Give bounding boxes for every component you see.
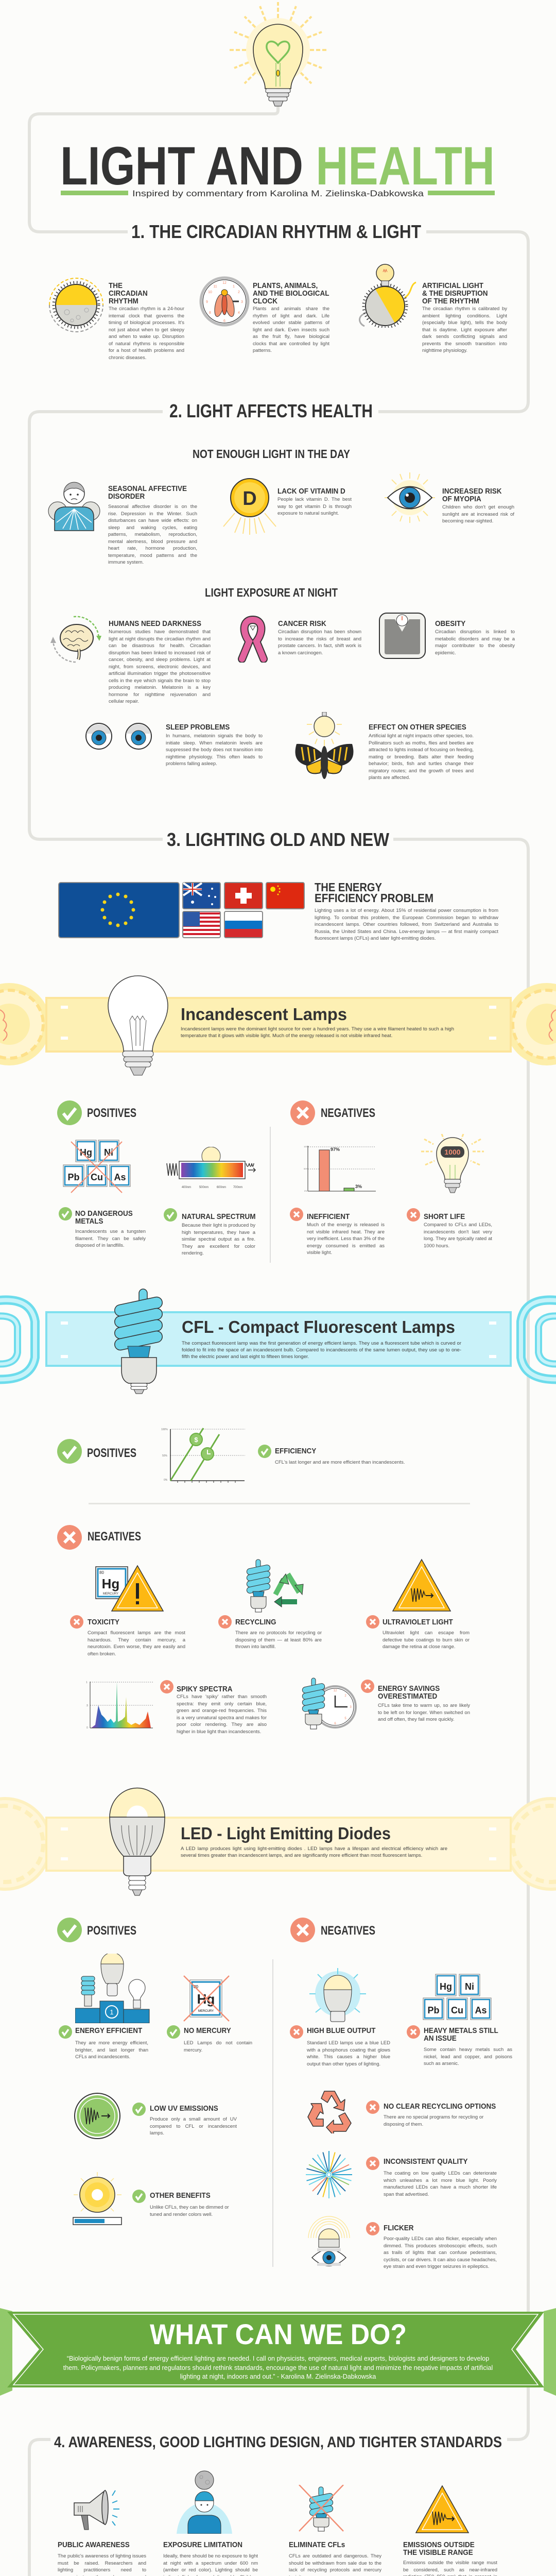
- icon: CFL with clock: 12: [334, 1689, 337, 1692]
- icon: crossed mercury: Hg: [197, 1991, 215, 2007]
- icon: heavy metals tiles: Ni: [465, 1981, 474, 1992]
- item: obesity: [379, 613, 515, 659]
- item: no mercury: [167, 2025, 254, 2056]
- icon: clock with fly: 1: [233, 285, 235, 289]
- item: circadian rhythm: [49, 278, 184, 361]
- icon: moth under bulb: [296, 712, 353, 779]
- item: exposure limitation: [163, 2541, 259, 2576]
- icon: CFL with clock: 6: [334, 1722, 336, 1725]
- item: circadian rhythm: RHYTHM: [109, 297, 138, 306]
- item: public awareness: [58, 2541, 147, 2576]
- banner: incandescent lamps: [0, 975, 556, 1076]
- item: spiky spectra: CFLs have 'spiky' rather than smooth spectra: they emit only certain blue, green and orange-red frequencies. This is a very unnatural spectra and makes for poor color rendering. They are also higher in blue light than incandescents.: [177, 1694, 267, 1734]
- item: flicker: [305, 2215, 498, 2279]
- item: heavy metals still an issue: AN ISSUE: [424, 2034, 457, 2043]
- item: high blue output: Standard LED lamps use a blue LED with a phosphorus coating that glows white. This causes a higher blue output than other types of lighting.: [307, 2040, 390, 2067]
- icon: natural spectrum bulb: 500nm: [199, 1186, 208, 1189]
- item: plants animals clock: [200, 276, 329, 353]
- banner: CFL: CFL - Compact Fluorescent Lamps: [182, 1317, 455, 1336]
- item: plants animals clock: AND THE BIOLOGICAL: [253, 289, 329, 298]
- item: spiky spectra: SPIKY SPECTRA: [177, 1685, 233, 1693]
- item: other benefits: OTHER BENEFITS: [150, 2191, 211, 2200]
- icon: ultraviolet warning: [392, 1558, 451, 1612]
- icon: heavy metals tiles: [423, 1974, 493, 2021]
- item: heavy metals still an issue: Some contain heavy metals such as nickel, lead and copper, and poisons such as arsenic.: [424, 2047, 512, 2066]
- item: no dangerous metals: [59, 1207, 147, 1250]
- text block: energy efficiency problem: [315, 880, 498, 941]
- chart: spiky spectra: 0: [86, 1726, 88, 1730]
- icon: crossed CFL: [298, 2485, 344, 2532]
- icon: clock with fly: 10: [208, 291, 212, 294]
- item: toxicity: TOXICITY: [88, 1618, 119, 1626]
- item: inefficient: INEFFICIENT: [307, 1212, 350, 1221]
- item: humans need darkness: [50, 616, 211, 704]
- icon: 1000 hours bulb: [421, 1134, 484, 1197]
- icon: sun/moon circle: [49, 278, 103, 332]
- item: obesity: Circadian disruption is linked to metabolic disorders and may be a major contributer to the obesity epidemic.: [435, 629, 515, 655]
- item: ultraviolet light: ULTRAVIOLET LIGHT: [383, 1618, 453, 1626]
- item: energy savings overestimated: ENERGY SAVINGS: [378, 1684, 440, 1693]
- item: lack of vitamin D: People lack vitamin D. The best way to get vitamin D is through exposure to natural sunlight.: [277, 497, 352, 516]
- item: energy savings overestimated: [361, 1680, 471, 1726]
- icon: clock with fly: 6: [223, 319, 225, 323]
- icon: clock with fly: 3: [241, 300, 243, 304]
- icon: mercury toxicity warning: 80: [99, 1570, 104, 1575]
- item: no dangerous metals: METALS: [75, 1217, 103, 1226]
- item: circadian rhythm: The circadian rhythm is a 24-hour internal clock that governs the timing of biological processes. It's not just about when to get sleepy and when to wake up. Disruption of natural rhythms is responsible for a host of health problems and chronic diseases.: [109, 306, 184, 361]
- item: increased risk of myopia: OF MYOPIA: [442, 495, 481, 503]
- item: low UV emissions: LOW UV EMISSIONS: [150, 2104, 218, 2113]
- item: plants animals clock: Plants and animals share the rhythm of light and dark. Life evolved under stable patterns of light and dark. Even insects such as the fruit fly, have biological clocks that are controlled by light patterns.: [253, 306, 329, 353]
- item: emissions outside visible range: EMISSIONS OUTSIDE: [403, 2540, 475, 2549]
- item: short life: [407, 1208, 493, 1252]
- item: obesity: OBESITY: [435, 619, 465, 628]
- item: seasonal affective disorder: DISORDER: [108, 492, 145, 501]
- item: lack of vitamin D: LACK OF VITAMIN D: [277, 487, 345, 496]
- icon: natural spectrum bulb: [166, 1147, 256, 1189]
- icon: header light bulb with heart: [230, 2, 326, 106]
- icon: LED bulb: [110, 1788, 165, 1895]
- item: no mercury: LED Lamps do not contain mercury.: [184, 2040, 252, 2053]
- item: increased risk of myopia: INCREASED RISK: [442, 487, 502, 496]
- banner: CFL: The compact fluorescent lamp was the first generation of energy efficient lamps. They use a fluorescent tube which is curved or folded to fit into the space of an incandescent bulb. Compared to incandescents of the same lumen output, they use up to one-fifth the electric power and last eight to fifteen times longer.: [182, 1341, 461, 1360]
- item: short life: SHORT LIFE: [424, 1212, 465, 1221]
- item: toxicity: Compact fluorescent lamps are the most hazardous. They contain mercury, a neurotoxin. Even worse, they are easily and often broken.: [88, 1630, 185, 1657]
- icon: radiation warning triangle: [415, 2485, 470, 2534]
- icon: inefficiency bar chart: 3%: [355, 1184, 362, 1189]
- item: no clear recycling options: There are no special programs for recycling or disposing of them.: [384, 2114, 483, 2127]
- icon: clock with fly: [200, 276, 249, 327]
- item: effect on other species: EFFECT ON OTHER SPECIES: [369, 723, 466, 732]
- item: seasonal affective disorder: [48, 482, 197, 565]
- item: seasonal affective disorder: Seasonal affective disorder is on the rise. Depression in the Winter. Such disturbances can have wide effects: on sleep and waking cycles, eating patterns, metabolism, reproduction, mental alertness, blood pressure and heart rate, hormone production, temperature, mood patterns and the immune system.: [108, 504, 197, 565]
- item: inefficient: [290, 1208, 386, 1259]
- item: efficiency: [258, 1445, 433, 1465]
- icon: heavy metals tiles: As: [475, 2005, 487, 2015]
- icon: clock with fly: 2: [238, 291, 240, 294]
- chart: CFL efficiency: [160, 1427, 246, 1484]
- icon: mercury toxicity warning: [95, 1560, 165, 1613]
- item: efficiency: CFL's last longer and are more efficient than incandescents.: [275, 1460, 405, 1465]
- item: no clear recycling options: NO CLEAR RECYCLING OPTIONS: [384, 2102, 496, 2111]
- item: humans need darkness: Numerous studies have demonstrated that light at night disrupts the circadian rhythm and can be disastrous for health. Circadian disruption has been linked to increased risk of cancer, obesity, and sleep problems. Light at night, from screens, electronic devices, and artificial illumination trigger the photosensitive cells in the eye which signals the brain to stop producing melatonin. Melatonin is a key hormone for nighttime rejuvenation and cellular repair.: [109, 629, 211, 704]
- icon: mercury toxicity warning: MERCURY: [103, 1592, 118, 1596]
- positives header (LED): [57, 1917, 139, 1943]
- item: emissions outside visible range: THE VISIBLE RANGE: [403, 2548, 473, 2557]
- item: effect on other species: Artificial light at night impacts other species, too. Pollinators such as moths, flies and beetles are attracted to lights instead of focusing on feeding, mating or breeding. Bats alter their feeding behavior; birds, fish and turtles change their migratory routes; and the growth of trees and plants are affected.: [369, 733, 474, 781]
- item: heavy metals still an issue: [407, 2025, 513, 2072]
- icon: megaphone: [69, 2488, 121, 2531]
- banner: what can we do: [0, 2308, 556, 2397]
- item: eliminate CFLs: [289, 2541, 383, 2576]
- icon: vitamin D sun: D: [242, 488, 257, 510]
- icon: vitamin D sun: [223, 478, 276, 535]
- item: recycling: [218, 1615, 323, 1651]
- item: heavy metals still an issue: HEAVY METALS STILL: [424, 2026, 498, 2035]
- item: seasonal affective disorder: SEASONAL AFFECTIVE: [108, 484, 187, 493]
- text block: energy efficiency problem: Lighting uses a lot of energy. About 15% of residential power consumption is from lighting. To combat this problem, the European Commission began to withdraw incandescent lamps. Other countries followed, from Switzerland and Australia to Russia, the United States and China. Low-energy lamps — at first mainly compact fluorescent lamps (CFLs) and later light-emitting diodes.: [315, 908, 498, 941]
- icon: CFL with clock: 3: [350, 1706, 352, 1709]
- item: efficiency: EFFICIENCY: [275, 1447, 316, 1455]
- item: artificial light disruption: OF THE RHYTHM: [422, 297, 479, 306]
- item: artificial light disruption: [359, 264, 507, 353]
- icon: inefficiency bar chart: 97%: [331, 1147, 340, 1152]
- item: energy savings overestimated: CFLs take time to warm up, so are likely to be left on for longer. When switched on and off often, they fail more quickly.: [378, 1703, 470, 1722]
- icon: bulb over sun-moon: [359, 264, 416, 328]
- icon: clock with fly: 11: [213, 285, 217, 289]
- icon: heavy metals tiles: Pb: [427, 2005, 440, 2015]
- subtitle with green bars: Inspired by commentary from Karolina M. Zielinska-Dabkowska: [132, 189, 424, 198]
- icon: crossed heavy metals tiles: Pb: [67, 1172, 80, 1182]
- icon: CFL with recycling arrows: [246, 1558, 311, 1613]
- item: energy efficient: They are more energy efficient, brighter, and last longer than CFLs and incandescents.: [75, 2040, 148, 2060]
- positives header (incandescent): [57, 1100, 136, 1125]
- icon: crossed heavy metals tiles: Cu: [91, 1172, 103, 1182]
- icon: crossed heavy metals tiles: [63, 1140, 131, 1193]
- item: no mercury: NO MERCURY: [184, 2026, 231, 2035]
- item: ultraviolet light: [366, 1615, 471, 1651]
- negatives header (incandescent): [290, 1100, 375, 1125]
- item: no dangerous metals: Incandescents use a tungsten filament. They can be safely disposed of in landfills.: [75, 1229, 146, 1248]
- item: sleep problems: [85, 723, 263, 767]
- item: no dangerous metals: NO DANGEROUS: [75, 1209, 133, 1218]
- item: natural spectrum: [164, 1208, 256, 1260]
- negatives header (CFL): [57, 1524, 144, 1550]
- item: circadian rhythm: CIRCADIAN: [109, 289, 148, 298]
- item: plants animals clock: PLANTS, ANIMALS,: [253, 281, 318, 290]
- icon: mercury toxicity warning: Hg: [102, 1576, 119, 1591]
- item: high blue output: HIGH BLUE OUTPUT: [307, 2026, 376, 2035]
- item: artificial light disruption: & THE DISRUPTION: [422, 289, 488, 298]
- icon: crossed mercury: MERCURY: [198, 2010, 214, 2013]
- icon: clock with fly: 12: [222, 281, 227, 285]
- icon: CFL bulb: [114, 1289, 163, 1394]
- item: increased risk of myopia: Children who don't get enough sunlight are at increased risk of becoming near-sighted.: [442, 504, 514, 524]
- icon: crossed heavy metals tiles: Hg: [80, 1147, 92, 1158]
- chart: CFL efficiency: 50%: [162, 1454, 168, 1458]
- icon: sad person: [48, 482, 100, 531]
- item: effect on other species: [296, 712, 474, 781]
- item: eliminate CFLs: ELIMINATE CFLs: [289, 2540, 345, 2549]
- item: plants animals clock: CLOCK: [253, 297, 277, 306]
- icon: podium with lamps: [75, 1954, 150, 2023]
- item: low UV emissions: Produce only a small amount of UV compared to CFL or incandescent lamps.: [150, 2116, 237, 2136]
- item: natural spectrum: NATURAL SPECTRUM: [182, 1212, 256, 1221]
- icon: podium with lamps: 1: [110, 2008, 114, 2016]
- negatives header (LED): [290, 1917, 377, 1943]
- item: cancer risk: [238, 616, 361, 663]
- chart: spiky spectra: .5: [86, 1704, 88, 1707]
- item: toxicity: [70, 1615, 186, 1656]
- icon: crossed heavy metals tiles: Ni: [104, 1147, 113, 1158]
- item: sleep problems: SLEEP PROBLEMS: [166, 723, 230, 732]
- item: recycling: RECYCLING: [235, 1618, 276, 1626]
- icon: clock with fly: 8: [209, 311, 211, 315]
- item: exposure limitation: EXPOSURE LIMITATION: [163, 2540, 242, 2549]
- banner: incandescent lamps: Incandescent lamps were the dominant light source for over a hundred years. They use a wire filament heated to such a high temperature that it glows with visible light. Much of the energy released is not visible infrared heat.: [181, 1026, 454, 1039]
- icon: pink ribbon: [238, 616, 268, 663]
- icon: inefficiency bar chart: 0%: [304, 1190, 307, 1192]
- icon: CFL with clock: [300, 1677, 357, 1730]
- item: energy efficient: ENERGY EFFICIENT: [75, 2026, 142, 2035]
- item: high blue output: [290, 2025, 391, 2077]
- icon: CFL with clock: 5: [344, 1717, 346, 1720]
- item: cancer risk: CANCER RISK: [278, 619, 326, 628]
- banner: CFL: [0, 1285, 556, 1396]
- item: humans need darkness: HUMANS NEED DARKNESS: [109, 619, 201, 628]
- item: public awareness: PUBLIC AWARENESS: [58, 2540, 130, 2549]
- icon: heavy metals tiles: Cu: [451, 2005, 463, 2015]
- icon: natural spectrum bulb: 600nm: [217, 1186, 226, 1189]
- icon: blue glowing LED: [309, 1968, 366, 2022]
- item: artificial light disruption: The circadian rhythm is calibrated by ambient lighting conditions. Light (especially blue light), tells the body that is daytime. Light exposure after dark sends conflicting signals and prevents the smooth transition into nighttime physiology.: [422, 306, 507, 353]
- subtitle with green bars: [61, 189, 495, 198]
- chart: CFL efficiency: $: [194, 1436, 198, 1444]
- item: circadian rhythm: THE: [109, 281, 123, 290]
- item: inconsistent quality: [305, 2151, 498, 2200]
- item: inefficient: Much of the energy is released is not visible infrared heat. They are very inefficient. Less than 3% of the energy consumed is emitted as visible light.: [307, 1222, 385, 1256]
- item: inconsistent quality: The coating on low quality LEDs can deteriorate which unleashes a lot more blue light. Poorly manufactured LEDs can have a much shorter life span that advertised.: [384, 2171, 497, 2197]
- icon: 1000 hours bulb: 1000: [444, 1148, 461, 1156]
- item: other benefits: Unlike CFLs, they can be dimmed or tuned and render colors well.: [150, 2205, 229, 2217]
- icon: natural spectrum bulb: 700nm: [233, 1186, 242, 1189]
- item: inconsistent quality: INCONSISTENT QUALITY: [384, 2157, 468, 2166]
- icon: bathroom scale: [379, 613, 426, 659]
- item: increased risk of myopia: [385, 472, 515, 524]
- item: recycling: There are no protocols for recycling or disposing of them — at least 80% are thrown into landfill.: [235, 1630, 322, 1650]
- item: energy savings overestimated: OVERESTIMATED: [378, 1692, 437, 1701]
- icon: crossed heavy metals tiles: As: [114, 1172, 126, 1182]
- item: no clear recycling options: [307, 2089, 498, 2133]
- flags: [58, 882, 305, 938]
- icon: clock with fly: 4: [238, 311, 240, 315]
- icon: incandescent bulb: [108, 976, 168, 1075]
- icon: brain with cycle arrows: [50, 616, 101, 663]
- icon: inefficiency bar chart: 100%: [304, 1145, 309, 1148]
- chart: CFL efficiency: 100%: [161, 1428, 168, 1431]
- item: spiky spectra: [160, 1680, 268, 1740]
- icon: tired eyes: [85, 723, 152, 750]
- banner: LED: [0, 1785, 556, 1899]
- item: flicker: Poor-quality LEDs can also flicker, especially when dimmed. This produces stroboscopic effects, such as trails of lights that can confuse pedestrians, cyclists, or car drivers. It can also cause headaches, eye strain and even trigger seizures in epileptics.: [384, 2236, 497, 2269]
- icon: crossed mercury: [183, 1975, 230, 2022]
- item: low UV emissions: [74, 2092, 238, 2141]
- item: emissions outside visible range: [403, 2541, 498, 2576]
- item: other benefits: [72, 2172, 238, 2227]
- banner: LED: A LED lamp produces light using light-emitting diodes . LED lamps have a lifespan and electrical efficiency which are several times greater than incandescent lamps, and are significantly more efficient than most fluorescent lamps.: [181, 1846, 447, 1858]
- chart: spiky spectra: 1: [86, 1681, 88, 1684]
- icon: crossed mercury: 80: [194, 1985, 198, 1989]
- item: artificial light disruption: ARTIFICIAL LIGHT: [422, 281, 483, 290]
- item: ultraviolet light: Ultraviolet light can escape from defective tube coatings to burn skin or damage the retina at close range.: [383, 1630, 470, 1650]
- item: natural spectrum: Because their light is produced by high temperatures, they have a similar spectral output as a fire. They are excellent for color rendering.: [182, 1223, 255, 1256]
- chart: CFL efficiency: 0%: [164, 1479, 168, 1482]
- icon: CFL with clock: 2: [344, 1694, 346, 1698]
- icon: natural spectrum bulb: 400nm: [182, 1186, 191, 1189]
- positives header (CFL): [57, 1438, 139, 1464]
- item: short life: Compared to CFLs and LEDs, incandescents don't last very long. They are typically rated at 1000 hours.: [424, 1222, 492, 1249]
- icon: inefficiency bar chart: [304, 1145, 379, 1195]
- icon: person under moon: [175, 2470, 234, 2534]
- icon: clock with fly: 9: [206, 300, 208, 304]
- chart: spiky spectra: [86, 1681, 154, 1731]
- item: flicker: FLICKER: [384, 2224, 414, 2232]
- item: sleep problems: In humans, melatonin signals the body to initiate sleep. When melatonin levels are suppressed the body does not transition into nighttime physiology. This often leads to problems falling asleep.: [166, 733, 263, 767]
- item: lack of vitamin D: [223, 478, 352, 535]
- banner: what can we do: “Biologically benign forms of energy efficient lighting are needed. I call on physicists, engineers, medical experts, biologists and designers to develop them. Policymakers, planners and regulators should rethink standards, encourage the use of natural light and minimize the negative impacts of artificial lighting at night, indoors and out.” - Karolina M. Zielinska-Dabkowska: [63, 2355, 493, 2380]
- icon: eye with rays: [385, 472, 435, 523]
- item: energy efficient: [59, 2025, 149, 2062]
- icon: heavy metals tiles: Hg: [440, 1981, 452, 1992]
- banner: incandescent lamps: Incandescent Lamps: [181, 1005, 347, 1024]
- item: cancer risk: Circadian disruption has been shown to increase the risks of breast and prostate cancers. In fact, shift work is a known carcinogen.: [278, 629, 361, 655]
- icon: inefficiency bar chart: 50%: [304, 1167, 308, 1170]
